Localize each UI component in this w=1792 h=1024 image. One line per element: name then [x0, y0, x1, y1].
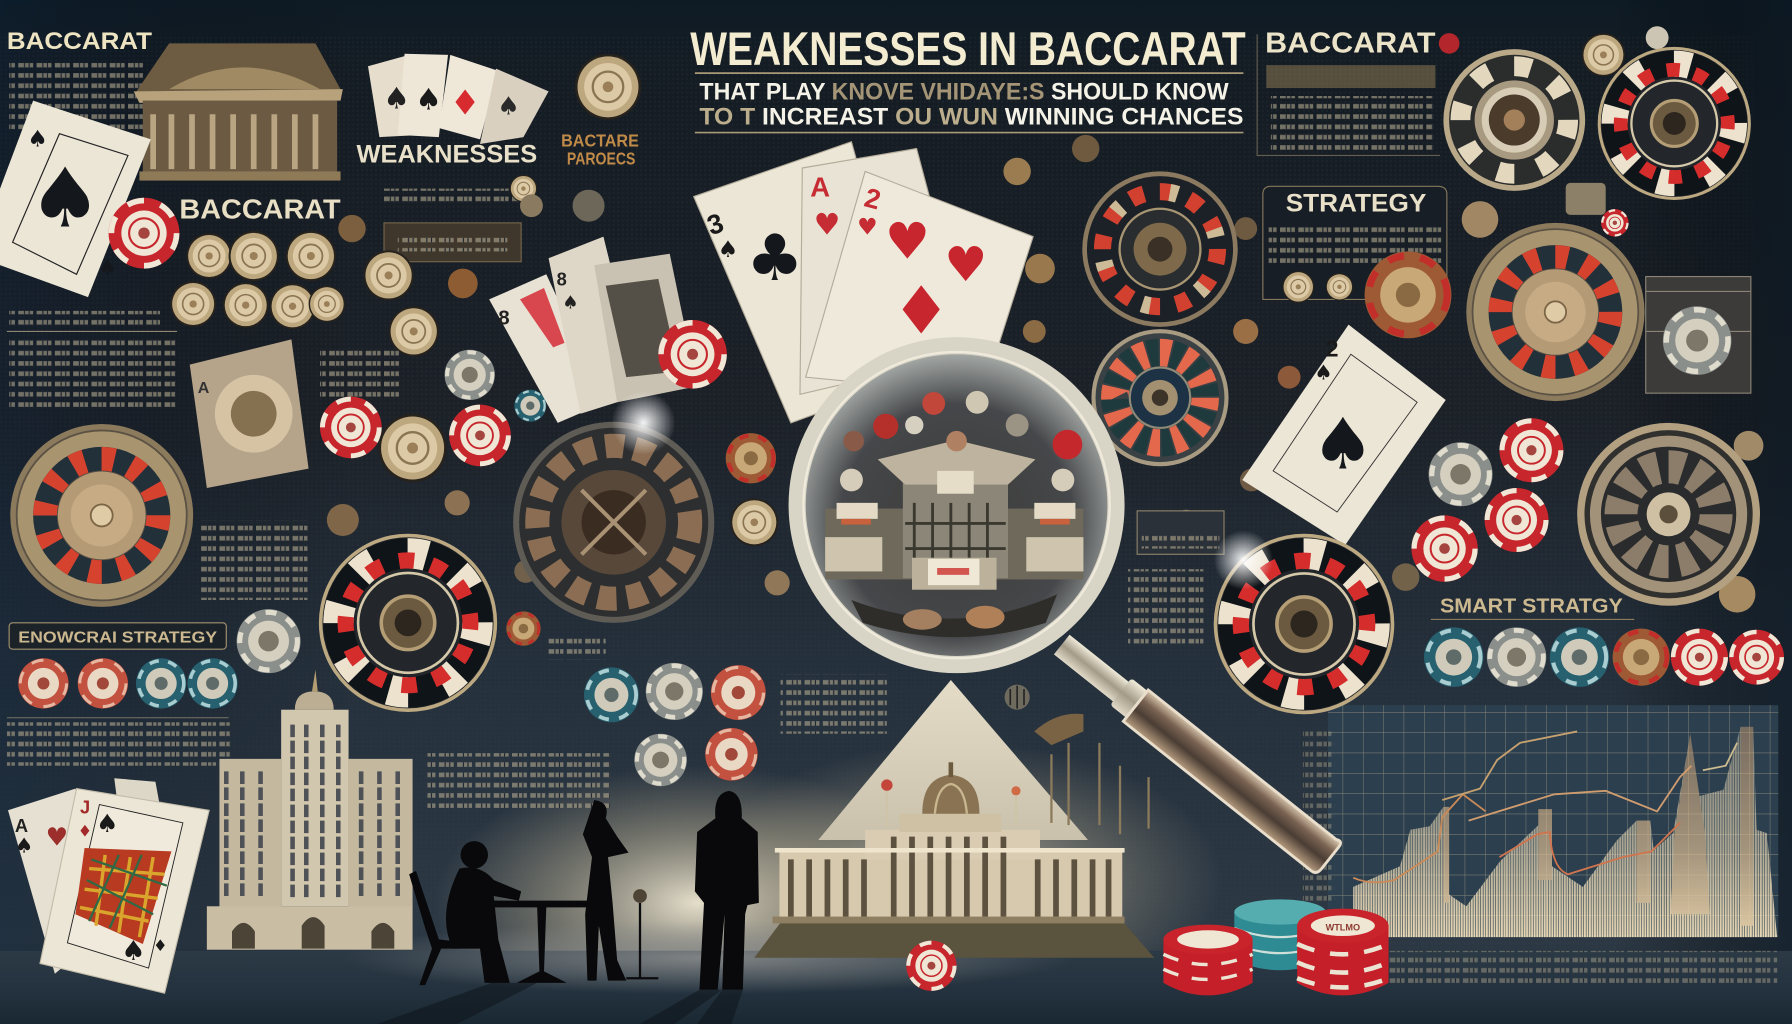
panel: strategy label left: ENOWCRAI STRATEGY [18, 629, 217, 646]
icon: top-left spade card: ♠ [27, 126, 48, 152]
icon: small card fan top [368, 54, 549, 144]
icon: bottom-left playing cards: ♥ [46, 823, 68, 852]
text block [9, 63, 144, 129]
chip row right [1424, 627, 1784, 687]
icon: gold ornate medallion [1365, 251, 1451, 338]
silhouette: seated man with chair and table [409, 841, 599, 985]
icon: playing card fan center: A [810, 172, 830, 203]
panel: right gauge [1646, 277, 1751, 393]
panel: smart strategy heading: SMART STRATGY [1440, 595, 1623, 618]
icon: bottom-left playing cards: ♦ [78, 822, 92, 841]
icon: gold medal top [575, 54, 641, 120]
label: baccarat parodes [561, 130, 639, 169]
icon: bottom-left playing cards: ♦ [153, 936, 167, 955]
icon: casino building top [134, 43, 343, 181]
icon: top-left spade card [0, 101, 151, 297]
panel: strategy label left [9, 623, 226, 649]
panel: top-left baccarat heading and text [7, 28, 152, 129]
icon: playing card fan center: ♥ [944, 237, 987, 293]
bars [1353, 727, 1777, 937]
text block: mid-left notes [320, 350, 400, 398]
icon: small card fan: 8 [498, 307, 510, 330]
heading: BACCARAT [1265, 28, 1436, 60]
wheel: right tan large [1466, 223, 1645, 401]
wheels: top right [1443, 47, 1751, 200]
chip group: right [1411, 418, 1563, 582]
chip group: upper left [109, 198, 345, 329]
text block [398, 238, 507, 251]
floor shadows [377, 983, 743, 1024]
heading: STRATEGY [1286, 189, 1427, 217]
icon: mid-right spade card: ♠ [1314, 360, 1333, 384]
icon: small card fan top: ♠ [415, 83, 442, 118]
icon: bottom-left playing cards: ♠ [121, 936, 146, 967]
stack: red left [1163, 925, 1253, 995]
icon: small card fan: 8 [557, 269, 567, 290]
magnifier handle [1048, 629, 1342, 875]
icon: small card fan top: ♠ [497, 91, 520, 120]
heading: main title: WEAKNESSES IN BACCARAT [690, 23, 1246, 75]
label: baccarat parodes: PAROECS [567, 149, 635, 169]
icon: photo card: A [198, 380, 210, 397]
ornaments: small gold tokens [327, 26, 1763, 613]
icon: central domed casino [754, 762, 1154, 958]
silhouette: standing woman [583, 800, 629, 981]
small tokens top right [1439, 33, 1629, 238]
icon: playing card fan center: 3 [703, 207, 727, 241]
icon: bottom-left playing cards: A [15, 815, 28, 836]
text blocks: lower-center notes [427, 511, 1224, 808]
spotlight beam [818, 680, 1088, 840]
wheel: large tan left [10, 424, 193, 607]
trend lines [1353, 731, 1737, 882]
chart x axis labels [1389, 951, 1777, 985]
icon: lower-left tower building [207, 670, 413, 950]
icon: photo card [190, 339, 309, 488]
subtitle: TO T INCREAST OU WUN WINNING CHANCES [699, 104, 1243, 131]
heading: baccarat second: BACCARAT [179, 193, 341, 224]
icon: mid-right spade card: ♠ [1311, 403, 1375, 486]
icon: playing card fan center: ♥ [857, 214, 878, 240]
wheel: glass center-left [513, 391, 714, 623]
icon: top-left spade card: ♠ [98, 255, 117, 279]
balloons beside dome [881, 779, 1021, 827]
icon: bottom-left playing cards: ♠ [15, 834, 33, 858]
heading: main title [690, 23, 1246, 133]
icon: top-left spade card: ♠ [28, 151, 102, 246]
chip stacks bottom [1163, 899, 1389, 995]
stack: red right [1297, 909, 1389, 995]
icon: playing card fan center: ♣ [746, 222, 804, 296]
label: baccarat parodes: BACTARE [561, 130, 639, 150]
wheels: center-right column [1082, 171, 1238, 466]
heading: baccarat: BACCARAT [7, 28, 152, 55]
icon: bottom-left playing cards: J [80, 797, 90, 818]
silhouette: standing man [695, 791, 759, 990]
subtitle [699, 78, 1243, 131]
chip group: mid-left [320, 397, 511, 482]
chip label: WTLMO [1326, 922, 1360, 932]
panel: weaknesses notes [384, 189, 521, 262]
text block: center-left notes [200, 520, 310, 600]
subtitle: THAT PLAY KNOVE VHIDAYE:S SHOULD KNOW [699, 78, 1229, 105]
icon: small card fan: ♠ [562, 293, 579, 314]
icon: mid-right spade card: 2 [1326, 336, 1338, 362]
text block: lower-left notes [7, 718, 231, 766]
icon: magnifying glass [789, 337, 1342, 875]
panel: strategy [1263, 186, 1447, 303]
icon: playing card fan center: ♦ [891, 272, 951, 350]
chip: bottom center [906, 941, 957, 991]
wheel: red and black center-right [1214, 530, 1394, 714]
chip row left [18, 609, 301, 709]
icon: bottom-left playing cards: ♠ [96, 809, 119, 838]
chart axis labels left [1303, 731, 1335, 903]
icon: playing card fan center [694, 142, 1033, 423]
panel: baccarat right [1257, 28, 1440, 155]
icon: playing card fan center: 2 [861, 182, 884, 215]
heading: weaknesses: WEAKNESSES [357, 140, 537, 168]
icon: small card fan top: ♠ [383, 82, 410, 117]
icon: small card fan top: ♦ [450, 83, 481, 123]
line and bar chart [1303, 705, 1778, 985]
icon: playing card fan center: ♠ [718, 237, 738, 263]
scene inside lens [825, 391, 1083, 637]
wheel: red and black left [319, 534, 497, 712]
icon: playing card fan center: ♥ [814, 207, 840, 242]
wheel: steel right [1577, 423, 1760, 606]
ornaments: below magnifier handle [626, 685, 1149, 978]
icon: bottom-left playing cards [8, 778, 209, 993]
panel: data table left [7, 311, 177, 410]
chips around center [506, 433, 778, 786]
icon: mid-right spade card [1242, 325, 1446, 545]
stack: teal [1234, 899, 1326, 970]
icon: small card fan [489, 237, 727, 423]
icon: playing card fan center: ♥ [885, 211, 930, 270]
